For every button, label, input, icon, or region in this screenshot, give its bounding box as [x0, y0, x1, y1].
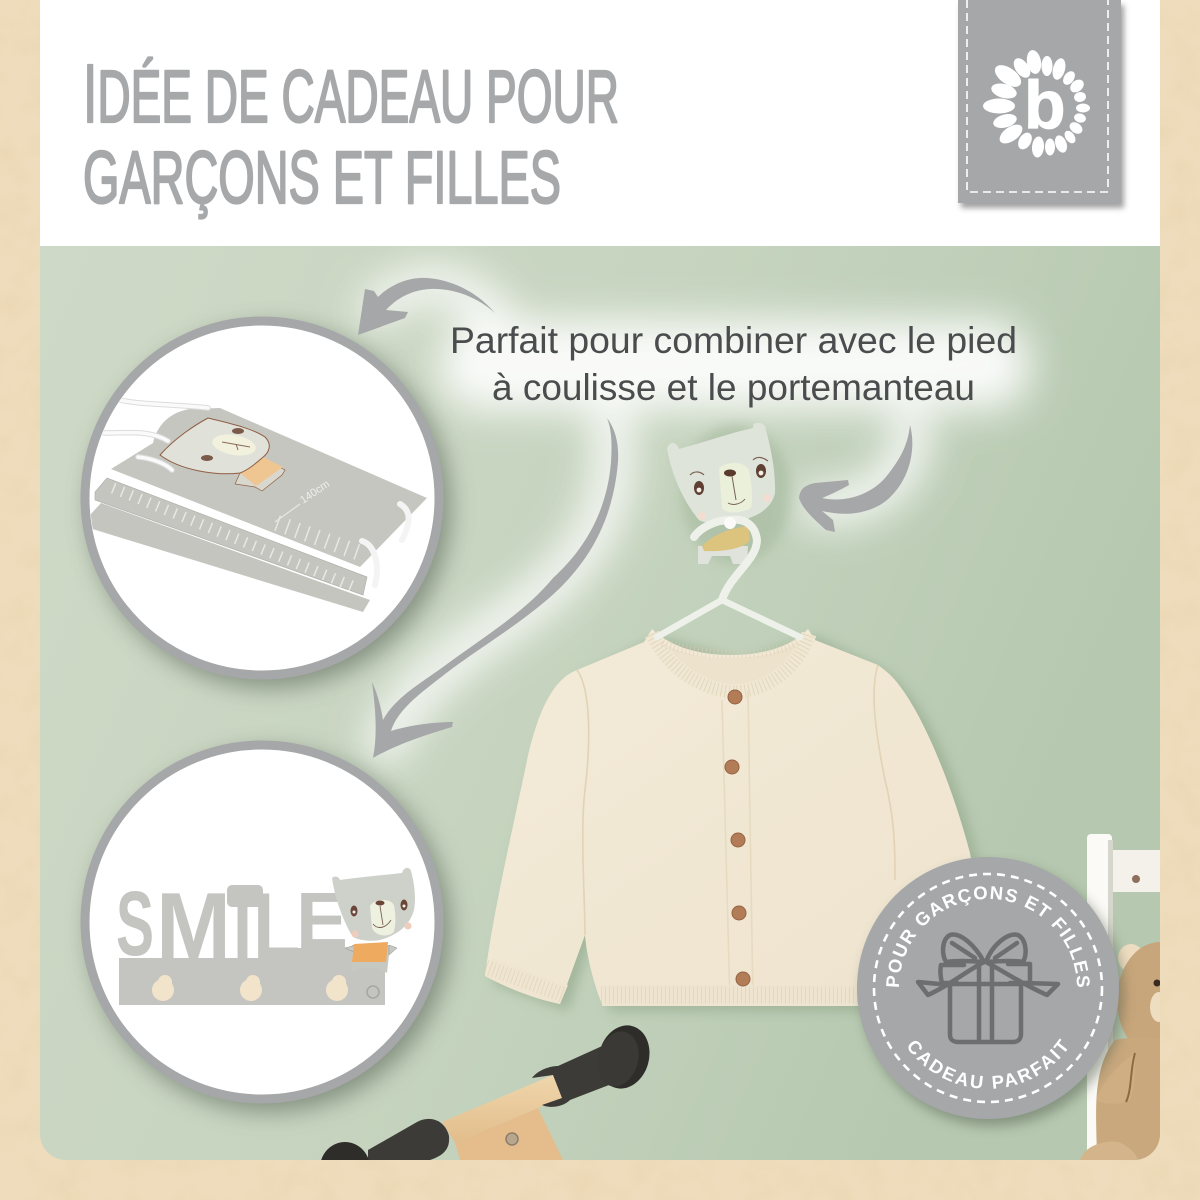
cords — [104, 400, 409, 585]
bear character — [351, 945, 390, 973]
pegs — [152, 975, 348, 1001]
arrow: to bear hook — [799, 425, 912, 532]
cardigan buttons — [725, 690, 750, 986]
SMILE lettering: I — [233, 873, 252, 978]
arrow: to coat rack — [372, 418, 618, 758]
title — [83, 47, 619, 219]
SMILE lettering — [118, 891, 345, 958]
text block: combination note: à coulisse et le portemanteau — [492, 367, 975, 408]
label: 140cm: 140cm — [298, 478, 332, 506]
panel: height chart product circle — [85, 321, 451, 688]
brand tag — [958, 0, 1124, 208]
cardigan — [485, 629, 1000, 1011]
text block: combination note — [450, 320, 1017, 408]
bear coat hook — [667, 423, 791, 564]
SMILE lettering: E — [296, 876, 348, 965]
title: GARÇONS ET FILLES — [83, 136, 561, 219]
icon: gift box — [918, 935, 1058, 1042]
white furniture post — [1087, 834, 1163, 1154]
arrow: to height chart — [358, 278, 495, 335]
SMILE lettering: S — [116, 873, 154, 975]
badge: perfect gift — [854, 857, 1130, 1132]
photo panel — [40, 246, 1160, 1160]
balance bike handlebar — [321, 1025, 650, 1160]
badge curved text: POUR GARÇONS ET FILLES — [886, 886, 1090, 987]
icon: brand flower logo: b — [1024, 67, 1066, 143]
teddy bear toy — [1080, 942, 1160, 1160]
hanger — [657, 517, 800, 637]
icon: brand flower logo — [983, 49, 1090, 158]
title: IDÉE DE CADEAU POUR — [83, 47, 619, 140]
SMILE lettering: M — [156, 873, 231, 978]
soft white glow behind text and arrows — [375, 284, 1030, 745]
badge curved text: CADEAU PARFAIT — [908, 1038, 1068, 1089]
badge curved text — [886, 886, 1090, 1089]
text block: combination note: Parfait pour combiner avec le pied — [450, 320, 1017, 361]
smile coat rack illustration — [116, 868, 415, 1005]
height chart illustration — [89, 400, 427, 612]
cardigan back neck — [667, 642, 798, 684]
SMILE lettering: L — [253, 873, 300, 978]
bear on height chart — [234, 468, 286, 492]
cardigan ribbed collar — [652, 634, 809, 692]
panel: coat rack product circle — [85, 745, 451, 1112]
header band — [40, 0, 1160, 246]
